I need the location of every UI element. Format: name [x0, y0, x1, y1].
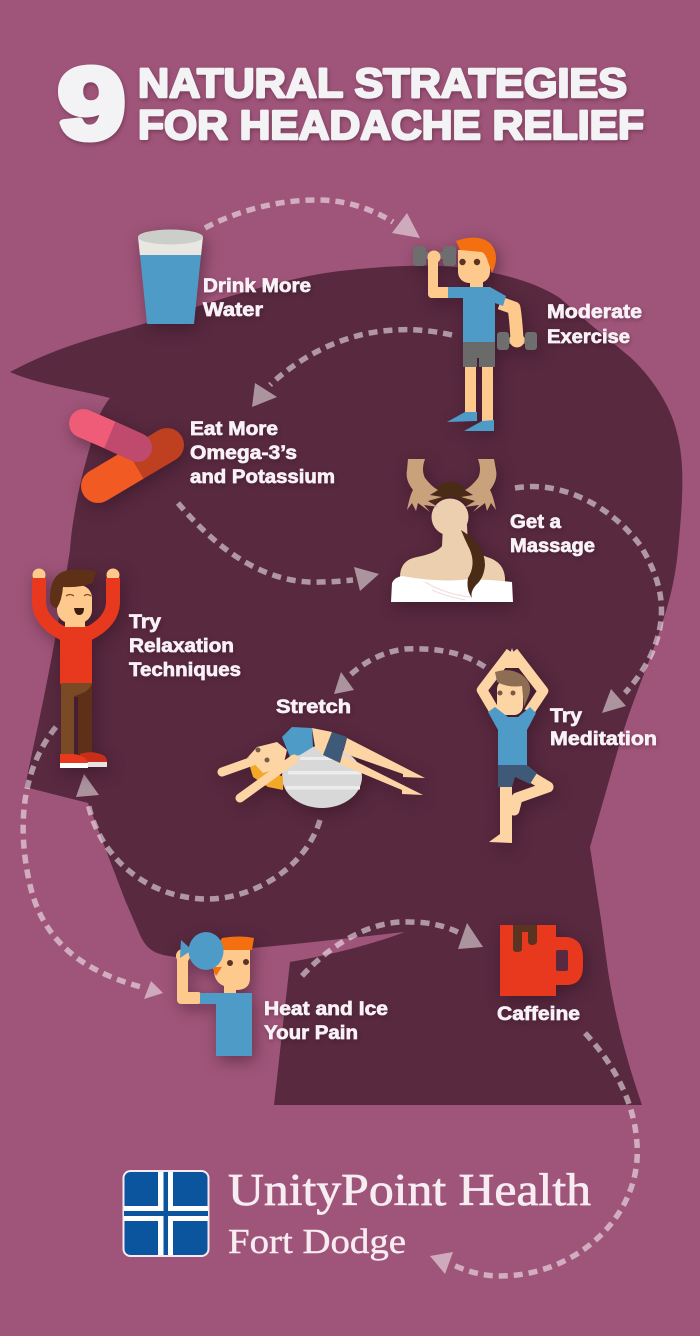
logo wordmark: UnityPoint Health	[228, 1165, 591, 1215]
label: eat more omega-3's and potassium: Omega-3’s	[190, 443, 297, 464]
label: moderate exercise: Moderate	[547, 302, 642, 323]
label: heat and ice your pain: Your Pain	[264, 1023, 358, 1044]
figure: woman receiving massage	[391, 459, 513, 602]
figure: man lifting dumbbells	[413, 237, 537, 431]
label: caffeine: Caffeine	[497, 1004, 580, 1025]
figure: man in tree pose	[482, 648, 548, 843]
label: try relaxation techniques	[129, 612, 241, 681]
label: try meditation: Meditation	[550, 729, 657, 750]
pink capsule	[69, 409, 152, 462]
arrow: stretch to relaxation	[76, 774, 320, 899]
label: try relaxation techniques: Relaxation	[129, 636, 234, 657]
arrow: omega-3 to massage	[178, 503, 379, 591]
figure: woman stretching on exercise ball	[222, 727, 425, 808]
label: drink more water: Water	[203, 300, 264, 321]
icon: supplement capsules	[69, 409, 184, 503]
head silhouette	[10, 266, 682, 1105]
label: heat and ice your pain	[264, 999, 388, 1044]
label: stretch: Stretch	[276, 697, 351, 718]
logo location: Fort Dodge	[228, 1222, 406, 1261]
label: drink more water	[203, 276, 311, 321]
label: eat more omega-3's and potassium: Eat More	[190, 419, 278, 440]
label: eat more omega-3's and potassium: and Potassium	[190, 467, 335, 488]
label: moderate exercise	[547, 302, 642, 348]
arrow: exercise to omega-3	[252, 330, 452, 407]
label: try meditation: Try	[550, 706, 582, 727]
title line 2: FOR HEADACHE RELIEF	[138, 102, 644, 148]
arrow: heat and ice to caffeine	[302, 922, 483, 976]
label: get a massage: Get a	[510, 512, 561, 533]
label: try relaxation techniques: Techniques	[129, 660, 241, 681]
figure: man with ice pack on head	[176, 932, 254, 1056]
arrow: water to exercise	[205, 200, 420, 238]
icon: coffee mug	[500, 925, 583, 996]
arrow: massage to meditation	[515, 487, 661, 713]
orange capsule	[81, 428, 184, 503]
label: eat more omega-3's and potassium	[190, 419, 335, 488]
arrow: relaxation to heat and ice	[23, 727, 163, 999]
title	[58, 48, 644, 160]
title line 1: NATURAL STRATEGIES	[138, 60, 627, 106]
icon: glass of water	[138, 230, 203, 324]
arrow: meditation to stretch	[334, 649, 485, 694]
title numeral 9: 9	[58, 48, 125, 160]
figure: laughing man with arms raised	[32, 568, 120, 768]
label: try meditation	[550, 706, 657, 750]
label: drink more water: Drink More	[203, 276, 311, 297]
arrow: caffeine to logo	[430, 1033, 637, 1276]
label: get a massage	[510, 512, 595, 557]
label: try relaxation techniques: Try	[129, 612, 161, 633]
label: get a massage: Massage	[510, 536, 595, 557]
logo: UnityPoint Health Fort Dodge	[124, 1165, 591, 1261]
label: moderate exercise: Exercise	[547, 327, 630, 348]
logo mark: cross	[124, 1171, 208, 1256]
label: heat and ice your pain: Heat and Ice	[264, 999, 388, 1020]
